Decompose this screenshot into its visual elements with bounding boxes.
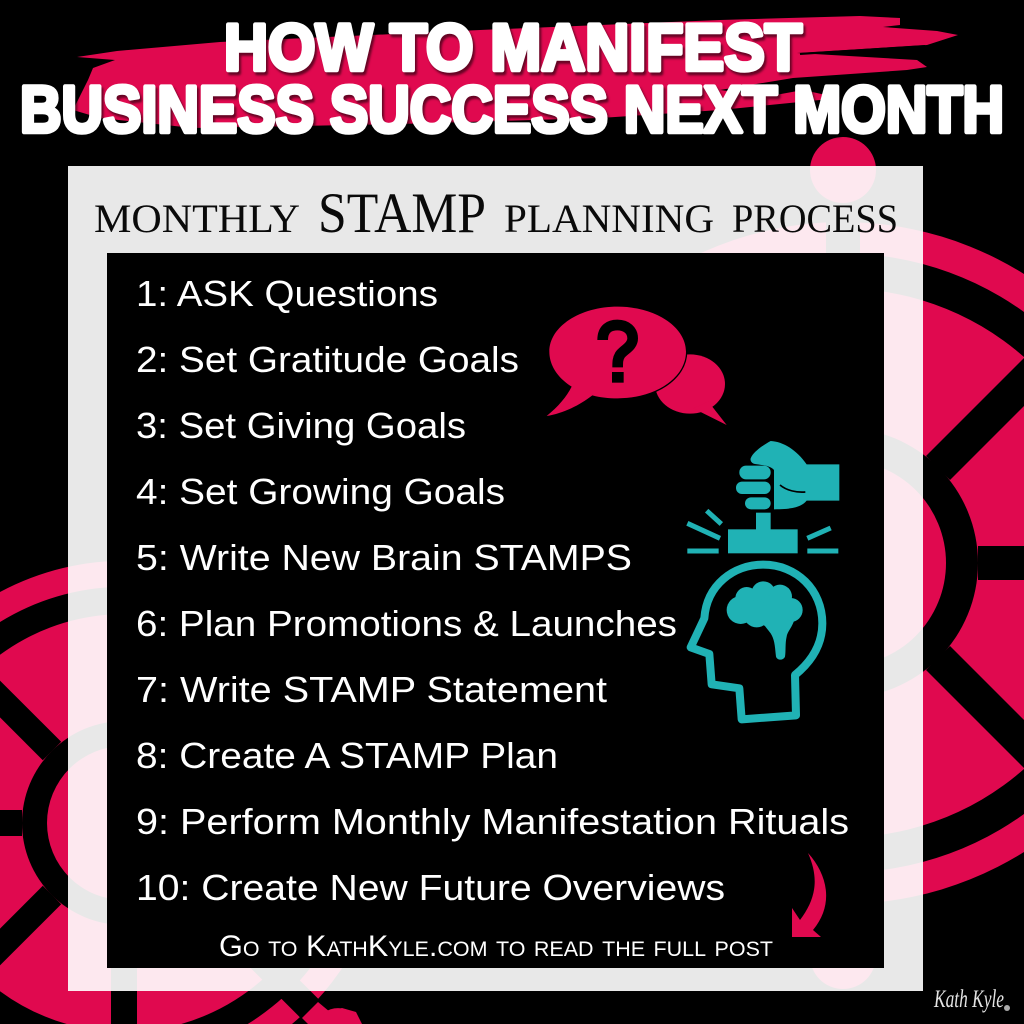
icon: speech bubbles with question mark (547, 307, 727, 425)
list of ten steps (136, 273, 849, 908)
brush stroke behind title (73, 16, 958, 128)
icon: head with brain (691, 565, 822, 719)
list of ten steps: 3: Set Giving Goals (136, 405, 466, 446)
list of ten steps: 7: Write STAMP Statement (136, 669, 607, 710)
list of ten steps: 10: Create New Future Overviews (136, 867, 725, 908)
heading: monthly STAMP planning process: PROCESS (732, 196, 898, 241)
list of ten steps: 5: Write New Brain STAMPS (136, 537, 632, 578)
list of ten steps: 9: Perform Monthly Manifestation Rituals (136, 801, 849, 842)
heading: monthly STAMP planning process (94, 182, 898, 245)
heading: monthly STAMP planning process: STAMP (318, 182, 486, 245)
panel: translucent white frame (68, 166, 923, 991)
arrow pointing to call to action (792, 853, 826, 937)
call to action text: Go to KathKyle.com to read the full post (219, 930, 773, 963)
list of ten steps: 6: Plan Promotions & Launches (136, 603, 677, 644)
icon: fist pressing stamp (687, 441, 839, 553)
panel: black list area (107, 253, 884, 968)
heading: monthly STAMP planning process: PLANNING (504, 196, 714, 241)
heading: monthly STAMP planning process: MONTHLY (94, 196, 300, 241)
list of ten steps: 4: Set Growing Goals (136, 471, 505, 512)
list of ten steps: 8: Create A STAMP Plan (136, 735, 558, 776)
list of ten steps: 2: Set Gratitude Goals (136, 339, 519, 380)
title: HOW TO MANIFEST (224, 10, 802, 84)
title (20, 10, 1004, 146)
background wheel: right (490, 137, 1024, 989)
list of ten steps: 1: ASK Questions (136, 273, 438, 314)
background wheel: left (0, 540, 400, 1024)
